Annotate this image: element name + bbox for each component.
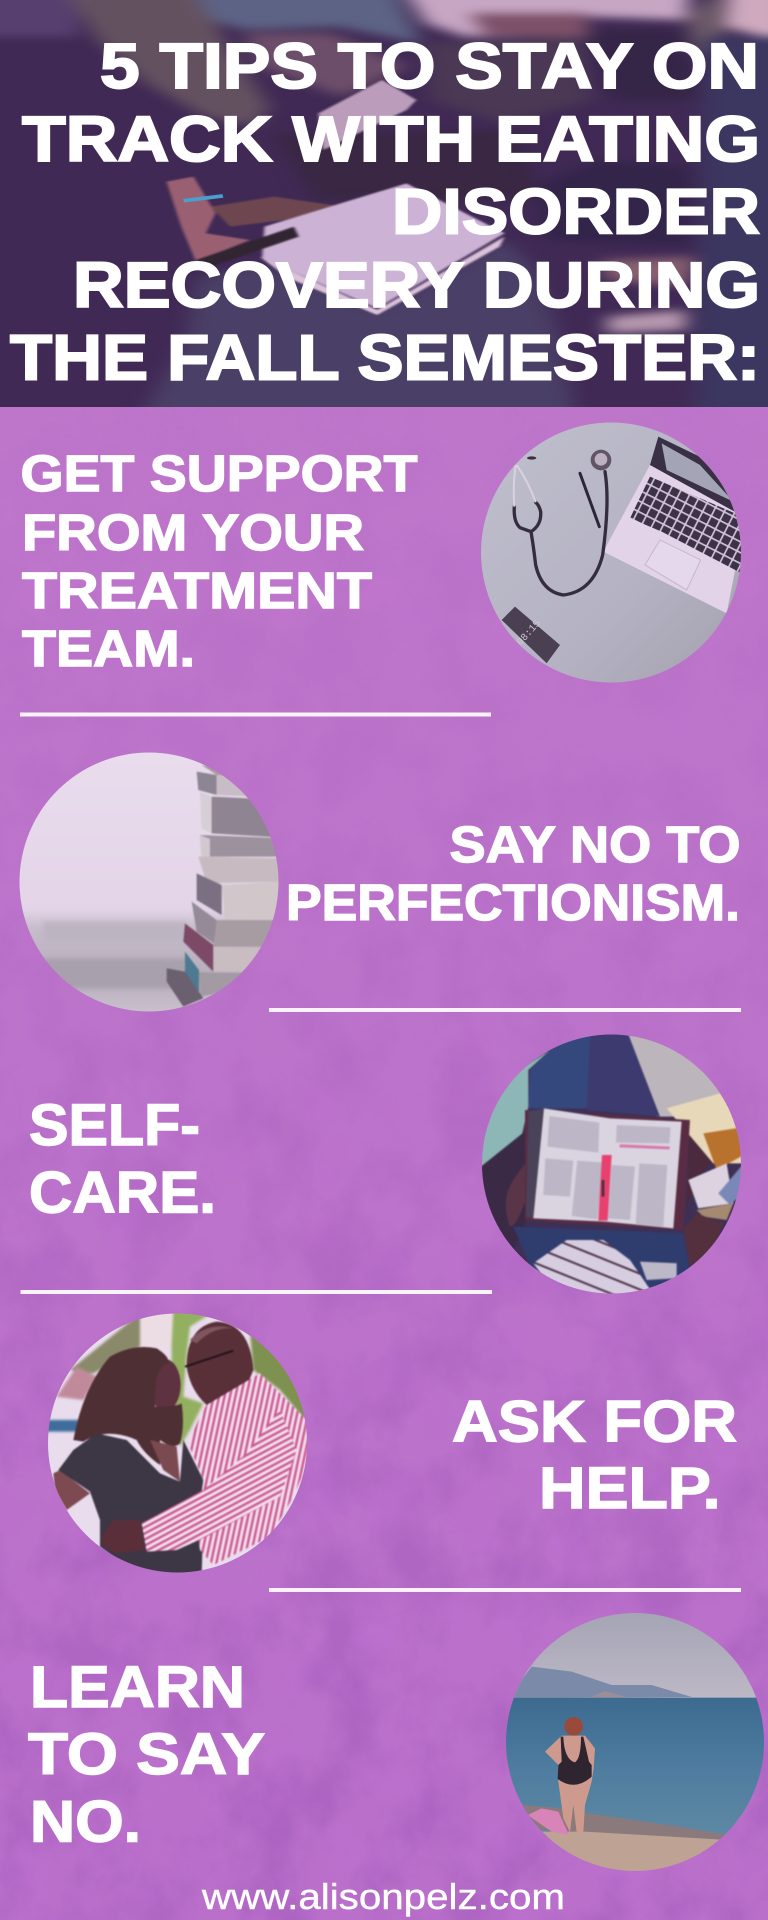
tip 1 heading: TEAM.: [22, 620, 195, 677]
photo circle: stack of books: [20, 752, 278, 1012]
tip 5 heading: [28, 1655, 265, 1854]
header photo: students taking notes with a purple overlay: [0, 0, 768, 423]
icon: smartphone showing 08:15: [502, 607, 560, 663]
tip 5 heading: TO SAY: [28, 1722, 265, 1787]
title: RECOVERY DURING: [73, 249, 760, 321]
tip 3 heading: CARE.: [29, 1161, 216, 1226]
divider 2: [269, 1008, 741, 1012]
photo circle: open book on lap: [482, 1034, 741, 1294]
tip 3 heading: [29, 1093, 216, 1226]
tip 1 heading: TREATMENT: [22, 562, 372, 619]
tip 3 heading: SELF-: [29, 1093, 200, 1158]
tip 2 heading: SAY NO TO: [450, 816, 740, 873]
photo circle: stethoscope and laptop on a desk: [477, 418, 747, 685]
icon: beach bag: [528, 1808, 569, 1835]
background panel: textured purple: [0, 1118, 768, 1920]
title: TRACK WITH EATING: [22, 103, 760, 175]
tip 1 heading: GET SUPPORT: [20, 445, 418, 502]
title: THE FALL SEMESTER:: [10, 322, 760, 394]
website url: www.alisonpelz.com: [201, 1876, 565, 1917]
icon: smartphone showing 08:15: 08:15: [515, 618, 543, 648]
title: DISORDER: [392, 176, 760, 248]
title: [10, 30, 760, 394]
divider 4: [269, 1588, 741, 1592]
tip 2 heading: [286, 816, 740, 931]
tip 4 heading: ASK FOR: [452, 1390, 737, 1454]
tip 1 heading: [20, 445, 418, 677]
divider 1: [20, 712, 491, 716]
tip 1 heading: FROM YOUR: [22, 504, 364, 561]
tip 5 heading: NO.: [30, 1790, 141, 1854]
title: 5 TIPS TO STAY ON: [100, 30, 759, 102]
tip 2 heading: PERFECTIONISM.: [286, 874, 740, 931]
tip 4 heading: HELP.: [539, 1456, 720, 1521]
divider 3: [20, 1290, 492, 1294]
photo circle: smiling couple embracing: [43, 1307, 313, 1580]
photo circle: woman on a beach looking at the sea: [498, 1605, 768, 1878]
icon: woman in black swimsuit: [545, 1717, 595, 1832]
tip 4 heading: [452, 1390, 737, 1521]
tip 5 heading: LEARN: [30, 1655, 245, 1720]
